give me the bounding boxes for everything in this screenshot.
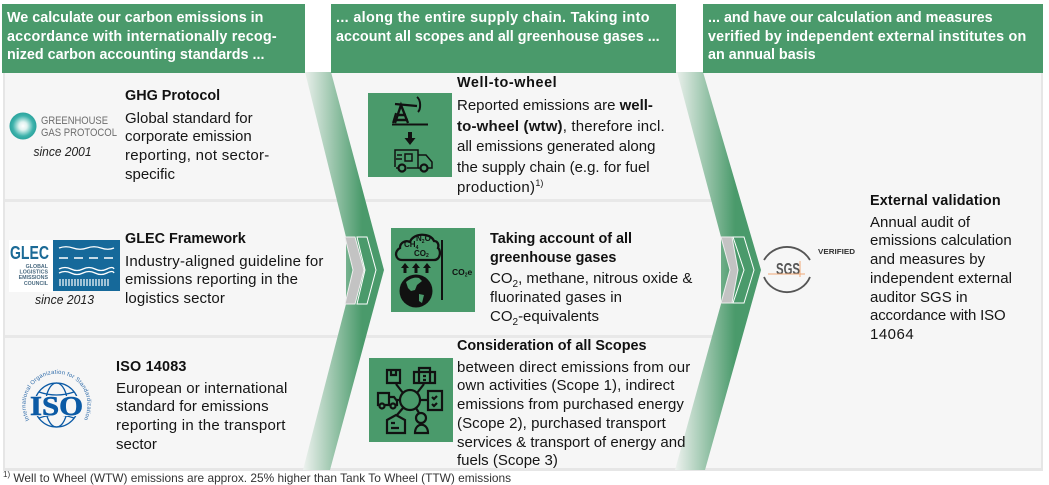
icon: oil pump and truck [368, 93, 452, 177]
icon: greenhouse gases and globe: CO [452, 267, 465, 277]
text: Scopes [457, 338, 690, 469]
text: External validation: External validation [870, 193, 1001, 209]
heading: supply chain column: account all scopes and all greenhouse gases ... [336, 29, 660, 45]
text: GLEC Framework: GLEC Framework [125, 231, 246, 247]
heading: standards column: nized carbon accounting standards ... [7, 47, 264, 63]
text: External validation: Annual audit of [870, 214, 970, 231]
text: External validation: independent external [870, 270, 1012, 287]
text: Well-to-wheel: the supply chain (e.g. for fuel [457, 158, 650, 176]
icon: scopes network [369, 358, 453, 442]
logo: SGS verified: VERIFIED [818, 247, 856, 256]
heading: supply chain column [331, 4, 676, 73]
text: greenhouse gases: CO2-equivalents [490, 308, 599, 328]
heading: validation column [703, 4, 1043, 73]
logo: GLEC: GLOBAL [26, 264, 49, 270]
text: ISO 14083: European or international [116, 380, 287, 397]
text: GLEC Framework [125, 231, 324, 307]
text: GHG Protocol: Global standard for [125, 110, 253, 127]
logo: GLEC [9, 240, 120, 307]
text: ISO 14083: sector [116, 436, 157, 453]
logo: GLEC: COUNCIL [24, 281, 49, 287]
text: Well-to-wheel: Well-to-wheel [457, 75, 557, 91]
text: External validation: and measures by [870, 251, 985, 268]
text: Well-to-wheel: Reported emissions are well- [457, 97, 653, 114]
text: GHG Protocol: specific [125, 166, 175, 183]
text: GLEC Framework: emissions reporting in the [125, 271, 298, 288]
text: Scopes: (Scope 2), purchased transport [457, 415, 666, 432]
text: External validation: 14064 [870, 326, 914, 343]
logo: ISO: ISO [30, 391, 83, 421]
text: GLEC Framework: logistics sector [125, 290, 225, 307]
heading: validation column: verified by independent external institutes on [708, 29, 1026, 45]
logo: SGS verified [763, 246, 856, 294]
text: GLEC Framework: Industry-aligned guideline for [125, 253, 324, 270]
text: ISO 14083: standard for emissions [116, 398, 269, 415]
text: Well-to-wheel: production)1) [457, 178, 543, 196]
logo: GLEC: since 2013 [35, 293, 94, 307]
text: Well-to-wheel: all emissions generated along [457, 138, 655, 155]
text: GHG Protocol: GHG Protocol [125, 88, 220, 104]
logo: GHG Protocol [10, 112, 117, 159]
logo: SGS verified: SGS [776, 260, 800, 278]
icon: greenhouse gases and globe: e [468, 267, 473, 277]
text: Scopes: between direct emissions from our [457, 359, 690, 376]
text: greenhouse gases: greenhouse gases [490, 250, 616, 266]
footnote: 1) Well to Wheel (WTW) emissions are approx. 25% higher than Tank To Wheel (TTW) emissions [3, 470, 511, 485]
text: Scopes: fuels (Scope 3) [457, 452, 558, 469]
text: GHG Protocol: reporting, not sector- [125, 147, 270, 164]
text: GHG Protocol [125, 88, 270, 183]
heading: standards column: We calculate our carbon emissions in [7, 10, 263, 26]
text: Scopes: emissions from purchased energy [457, 396, 684, 413]
text: greenhouse gases [490, 231, 692, 328]
logo: GHG Protocol: since 2001 [34, 145, 92, 159]
logo: GLEC: EMISSIONS [19, 275, 48, 281]
icon: greenhouse gases and globe [391, 228, 475, 312]
text: External validation [870, 193, 1012, 343]
logo: GHG Protocol: GREENHOUSE [41, 115, 108, 127]
text: Well-to-wheel: to-wheel (wtw), therefore incl. [457, 118, 665, 134]
icon: greenhouse gases and globe: 4 [416, 245, 419, 251]
logo: ISO: International Organization for Standardization [22, 370, 92, 422]
heading: supply chain column: ... along the entire supply chain. Taking into [336, 10, 650, 26]
text: External validation: emissions calculation [870, 232, 1012, 249]
text: External validation: auditor SGS in [870, 289, 968, 306]
icon: greenhouse gases and globe: CO [414, 249, 426, 258]
heading: standards column [2, 4, 305, 73]
icon: greenhouse gases and globe: 2 [426, 253, 429, 259]
text: Scopes: Consideration of all Scopes [457, 338, 647, 354]
logo: GLEC: LOGISTICS [19, 270, 48, 276]
heading: validation column: ... and have our calculation and measures [708, 10, 993, 26]
text: greenhouse gases: fluorinated gases in [490, 289, 622, 306]
icon: greenhouse gases and globe: N [416, 234, 422, 243]
icon: greenhouse gases and globe: O [425, 234, 431, 243]
heading: standards column: accordance with internationally recog- [7, 29, 277, 45]
text: ISO 14083: reporting in the transport [116, 417, 286, 434]
logo: GLEC: GLEC [10, 243, 49, 263]
text: ISO 14083: ISO 14083 [116, 359, 187, 375]
text: greenhouse gases: CO2, methane, nitrous oxide & [490, 270, 692, 290]
text: ISO 14083 [116, 359, 287, 453]
icon: greenhouse gases and globe: CH [404, 240, 416, 249]
text: Scopes: own activities (Scope 1), indirect [457, 377, 674, 394]
text: greenhouse gases: Taking account of all [490, 231, 632, 247]
heading: validation column: an annual basis [708, 47, 816, 63]
icon: greenhouse gases and globe: 2 [422, 239, 425, 245]
text: Well-to-wheel [457, 75, 665, 196]
icon: greenhouse gases and globe: 2 [465, 272, 468, 278]
text: GHG Protocol: corporate emission [125, 128, 252, 145]
text: External validation: accordance with ISO [870, 307, 1006, 324]
text: Scopes: services & transport of energy and [457, 434, 685, 451]
